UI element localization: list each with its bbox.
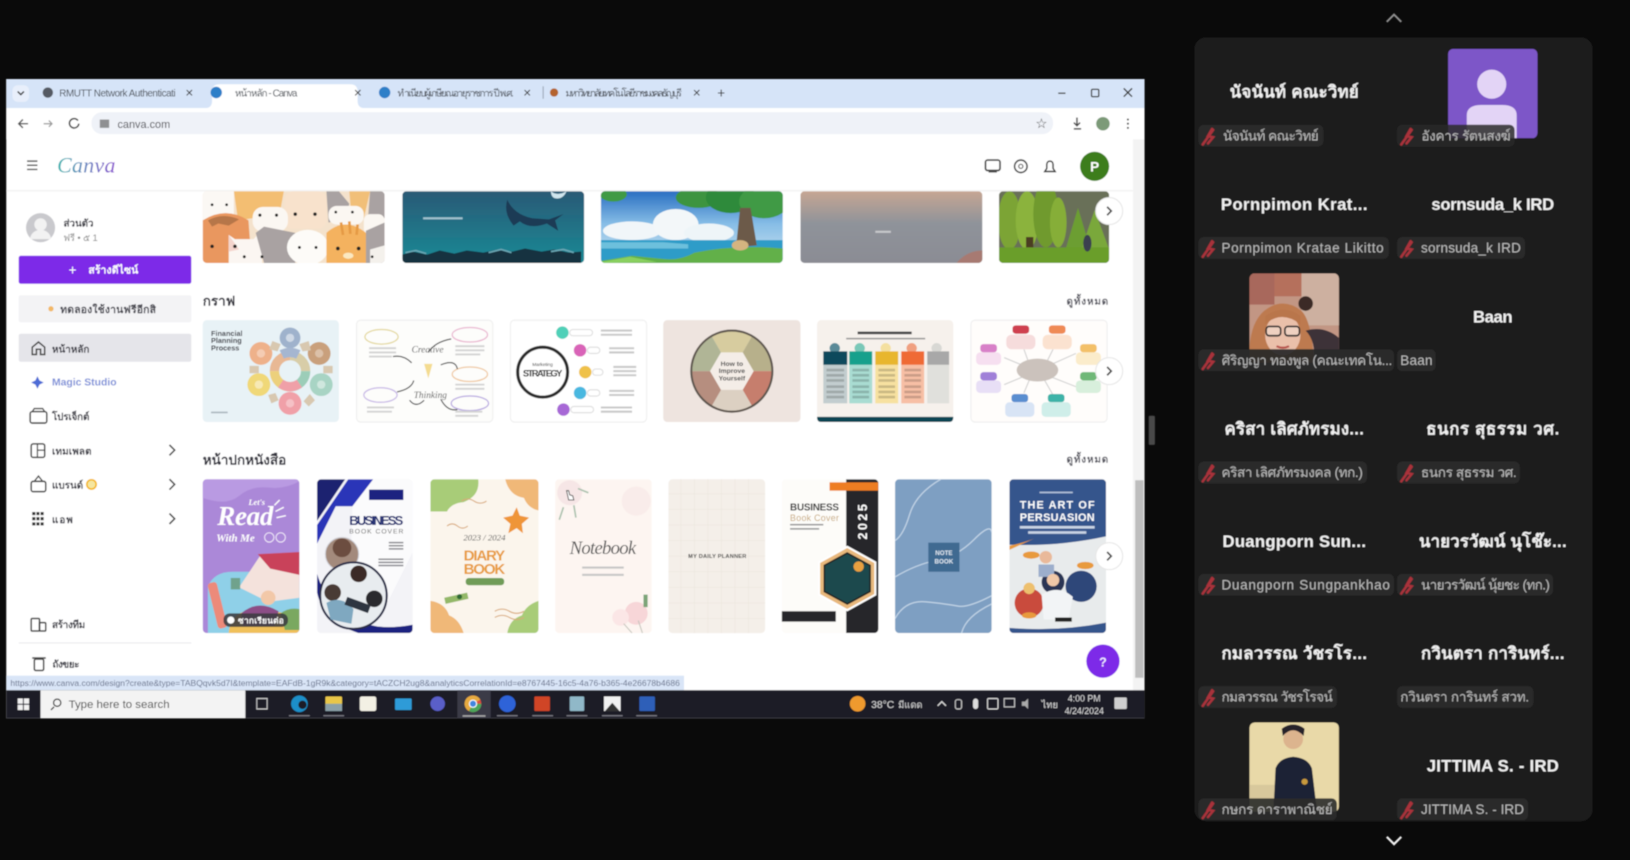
- browser tab strip: [6, 79, 1145, 108]
- participant row 1: นัจนันท์ คณะวิทย์: [1230, 83, 1359, 102]
- nav: brand: แบรนด์: [52, 480, 83, 492]
- participant row 4: คริสา เลิศภัทรมง...: [1225, 420, 1364, 439]
- start button: [18, 699, 29, 710]
- cover: let's read with me: Read: [216, 501, 274, 531]
- windows taskbar: [6, 690, 1145, 718]
- cover: let's read with me: [203, 479, 299, 633]
- participant row 6: [1199, 643, 1564, 708]
- participant row 7: [1199, 756, 1559, 820]
- nav: brand: [31, 476, 175, 492]
- thumbnail row: graphs: [203, 320, 1123, 422]
- cover: the art of persuasion: [1009, 479, 1106, 633]
- next arrow: [1096, 543, 1123, 570]
- nav: projects: โปรเจ็กต์: [51, 410, 89, 423]
- thumbnail row: book covers: [203, 479, 1123, 633]
- strategy graph: STRATEGY: [523, 368, 563, 378]
- browser address bar: canva.com: [117, 119, 170, 131]
- nav: apps: แอพ: [52, 515, 73, 526]
- participant row 1: นัจนันท์ คณะวิทย์: [1223, 127, 1319, 143]
- browser tab strip: หน้าหลัก - Canva: [235, 88, 298, 100]
- beach banner: [800, 191, 982, 263]
- Canva header: P: [1090, 160, 1099, 175]
- cover: let's read with me: ซากเรียนต่อ: [238, 616, 284, 626]
- participant row 5: นายวรวัฒน์ นุ้ยชะ (ทก.): [1421, 576, 1550, 593]
- search box: Type here to search: [69, 699, 170, 711]
- whale banner: [402, 191, 584, 263]
- see all link: ดูทั้งหมด: [1067, 452, 1108, 467]
- cover: notebook floral: Notebook: [569, 538, 637, 559]
- status url bubble: [6, 676, 684, 690]
- weather: มีแดด: [898, 699, 922, 710]
- avatar tile: purple placeholder: [1448, 49, 1537, 138]
- nav: create team: [31, 619, 85, 631]
- browser address bar: ☆: [1035, 116, 1047, 131]
- mind map sketch: Creative: [412, 345, 443, 355]
- participant row 6: กวินตรา การินทร์ สวท.: [1400, 689, 1529, 705]
- participant row 5: Duangporn Sun...: [1222, 532, 1366, 551]
- cover: let's read with me: With Me: [216, 533, 255, 545]
- how to improve yourself graph: [663, 320, 800, 422]
- cover: business 2025: Book Cover: [790, 513, 839, 523]
- browser tab strip: ทำเนียบผู้เกษียณอายุราชการ ปี พ.ศ.: [397, 88, 514, 100]
- profile: ส่วนตัว: [63, 218, 94, 230]
- nav: projects: [30, 409, 89, 423]
- mind map sketch: Thinking: [414, 391, 447, 401]
- participant row 4: ธนกร สุธรรม วศ.: [1426, 420, 1559, 440]
- cover: the art of persuasion: THE ART OF: [1020, 499, 1095, 511]
- avatar tile: woman with glasses: [1249, 273, 1339, 363]
- financial planning graph: Process: [211, 343, 239, 352]
- participant row 5: [1199, 531, 1567, 596]
- mind map sketch: [357, 320, 493, 422]
- create design button: +: [69, 262, 77, 277]
- browser tab strip: ✕: [185, 89, 194, 100]
- profile: ฟรี • ๕ 1: [63, 232, 98, 243]
- participant row 1: [1199, 83, 1515, 147]
- participant panel: [1194, 37, 1593, 821]
- heading: book covers: หน้าปกหนังสือ: [203, 453, 286, 468]
- cover: diary book: 2023 / 2024: [463, 533, 506, 543]
- browser address bar: [6, 108, 1145, 139]
- left sidebar: [19, 213, 191, 670]
- free trial button: [19, 295, 191, 322]
- participant row 7: JITTIMA S. - IRD: [1427, 756, 1559, 775]
- profile: [26, 213, 98, 243]
- browser tab strip: มหาวิทยาลัยเทคโนโลยีราชมงคลธัญบุรี: [566, 88, 683, 100]
- heading: graphs: กราฟ: [203, 294, 235, 309]
- scroll up chevron: [1387, 15, 1401, 22]
- nav: home: หน้าหลัก: [52, 343, 89, 355]
- how to improve yourself graph: How to: [721, 361, 743, 368]
- cover: diary book: [430, 479, 538, 633]
- cloud mind map: [971, 320, 1107, 422]
- cover: business 2025: BUSINESS: [790, 502, 839, 513]
- nav: create team: สร้างทีม: [52, 619, 85, 631]
- participant row 4: คริสา เลิศภัทรมงคล (ทก.): [1221, 465, 1363, 480]
- next arrow: [1096, 358, 1123, 385]
- create design button: สร้างดีไซน์: [88, 263, 139, 276]
- strategy graph: [510, 320, 647, 422]
- help button: ?: [1099, 655, 1107, 669]
- browser tab strip: RMUTT Network Authenticati: [59, 89, 176, 100]
- nav: magic studio: Magic Studio: [52, 378, 117, 389]
- cover: my daily planner: MY DAILY PLANNER: [688, 554, 746, 560]
- system tray: 4/24/2024: [1065, 706, 1104, 716]
- anime landscape banner: [600, 190, 784, 264]
- how to improve yourself graph: Yourself: [719, 375, 746, 382]
- status url bubble: https://www.canva.com/design?create&type=TABQqvk5d7I&template=EAFdB-1gR9k&category=tACZCH2ug8&analyticsCorrelationId=e8767445-16c5-4a76-b365-4e26678b4686: [10, 678, 680, 688]
- financial planning graph: Financial: [211, 329, 243, 338]
- financial planning graph: [203, 320, 339, 422]
- participant row 5: Duangporn Sungpankhao: [1221, 577, 1390, 592]
- weather: [850, 696, 922, 712]
- cover: diary book: DIARY: [464, 547, 505, 564]
- strategy graph: Marketing: [532, 362, 553, 367]
- participant row 3: Baan: [1473, 307, 1513, 326]
- participant row 3: Baan: [1400, 353, 1432, 368]
- cover: let's read with me: Let's: [247, 498, 265, 507]
- participant row 7: กษกร ดาราพาณิชย์: [1221, 801, 1333, 817]
- cats banner: [203, 191, 385, 265]
- nav: templates: เทมเพลต: [52, 446, 91, 457]
- pinned app icons: [257, 690, 657, 718]
- scrollbar: [1133, 139, 1145, 690]
- system tray: [938, 694, 1127, 716]
- participant row 2: Pornpimon Krat...: [1221, 195, 1368, 214]
- participant row 6: กมลวรรณ วัชรโรจน์: [1221, 689, 1333, 705]
- cover: notebook floral: [555, 479, 652, 633]
- mouse cursor: [567, 491, 574, 500]
- how to improve yourself graph: Improve: [719, 368, 745, 375]
- financial planning graph: Planning: [211, 336, 242, 345]
- willow trees banner: [998, 181, 1109, 263]
- cover: business book cover: BOOK COVER: [349, 528, 403, 535]
- browser tab strip: ✕: [353, 89, 362, 100]
- browser tab strip: +: [717, 86, 725, 101]
- cover: note book blue: BOOK: [935, 558, 954, 565]
- Canva header: [6, 152, 1133, 191]
- next arrow: [1096, 198, 1123, 225]
- nav: home: [19, 334, 191, 362]
- marketing strategy columns: [817, 320, 953, 422]
- participant row 1: อังคาร รัตนสงฆ์: [1421, 127, 1511, 143]
- participant row 6: กวินตรา การินทร์...: [1421, 644, 1564, 663]
- browser tab strip: ✕: [692, 89, 701, 100]
- nav: trash: ถังขยะ: [52, 658, 79, 670]
- Canva header: Canva: [57, 154, 115, 178]
- see all link: ดูทั้งหมด: [1067, 294, 1108, 309]
- participant row 5: นายวรวัฒน์ นุโช๊ะ...: [1419, 531, 1567, 552]
- cover: business 2025: 2025: [856, 504, 870, 540]
- avatar tile: woman in uniform: [1250, 722, 1339, 812]
- cover: the art of persuasion: PERSUASION: [1020, 512, 1095, 524]
- participant row 6: กมลวรรณ วัชรโร...: [1221, 643, 1367, 663]
- split handle: [1149, 416, 1155, 445]
- cover: business book cover: BUSINESS: [349, 513, 404, 528]
- participant row 3: [1199, 307, 1513, 371]
- nav: apps: [32, 514, 175, 526]
- free trial button: ทดลองใช้งานฟรีอีกสิ: [60, 303, 157, 316]
- cover: business 2025: [782, 479, 878, 633]
- participant row 2: sornsuda_k IRD: [1431, 195, 1554, 214]
- system tray: ไทย: [1041, 699, 1058, 710]
- scroll down chevron: [1387, 837, 1401, 844]
- thumbnail row: presentations: [202, 190, 1124, 264]
- cover: note book blue: [895, 479, 992, 633]
- participant row 3: ศิริญญา ทองพูล (คณะเทคโน...: [1222, 352, 1392, 369]
- nav: templates: [31, 444, 175, 457]
- participant row 7: JITTIMA S. - IRD: [1421, 802, 1524, 817]
- participant row 4: [1199, 420, 1559, 483]
- participant row 2: Pornpimon Kratae Likitto: [1221, 241, 1384, 256]
- help button: [1086, 645, 1120, 678]
- cover: business book cover: [317, 479, 413, 633]
- participant row 2: sornsuda_k IRD: [1421, 241, 1521, 256]
- create design button: [19, 256, 191, 284]
- nav: trash: [32, 658, 79, 670]
- weather: 38°C: [871, 700, 895, 711]
- participant row 4: ธนกร สุธรรม วศ.: [1421, 465, 1517, 481]
- participant row 2: [1199, 195, 1554, 259]
- browser window: [6, 79, 1145, 718]
- system tray: 4:00 PM: [1068, 694, 1101, 704]
- cover: note book blue: NOTE: [935, 550, 953, 557]
- search box: [41, 690, 245, 718]
- cover: my daily planner: [668, 479, 765, 633]
- nav: magic studio: [31, 376, 117, 389]
- browser tab strip: ✕: [523, 89, 532, 100]
- cover: diary book: BOOK: [464, 561, 505, 578]
